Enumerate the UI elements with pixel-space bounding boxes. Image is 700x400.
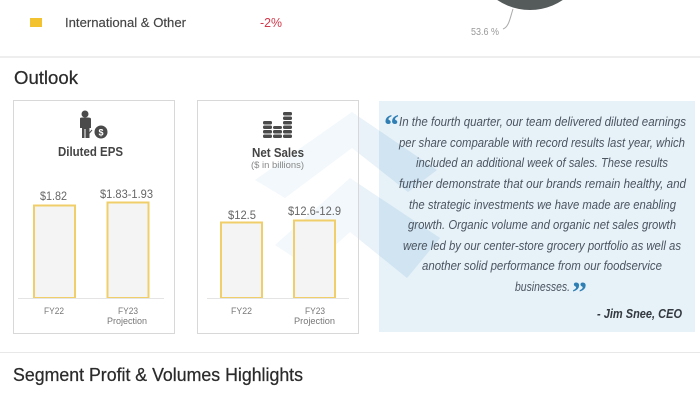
bar chart: Net Sales: FY22: [231, 306, 252, 316]
bar chart: Diluted EPS: $1.83-1.93: [100, 187, 153, 201]
bar chart: Net Sales: $12.5: [228, 208, 256, 222]
attribution: - Jim Snee, CEO: [597, 306, 682, 321]
panel: Diluted EPS: [14, 100, 174, 334]
icon: person with dollar coin: [80, 110, 108, 138]
bar chart: Diluted EPS: Projection: [107, 316, 147, 326]
bar chart: Net Sales: $12.6-12.9: [288, 204, 341, 218]
pie chart fragment with label: 53.6 %: [471, 27, 499, 38]
bar chart: Net Sales: Projection: [294, 316, 335, 326]
bar chart: Net Sales: [207, 204, 349, 326]
legend row: International & Other: International & Other: [65, 15, 187, 30]
quote text: [398, 114, 687, 294]
heading: Outlook: Outlook: [14, 68, 79, 88]
closing quote mark: ”: [572, 276, 587, 309]
icon: coin stacks: [263, 112, 292, 138]
quote text: businesses.: [515, 279, 570, 294]
bar chart: Diluted EPS: FY22: [44, 306, 64, 316]
legend row: International & Other: [30, 15, 282, 30]
bar chart: Net Sales: FY23: [305, 306, 325, 316]
subheading: units: ($ in billions): [251, 160, 304, 171]
bar chart: Diluted EPS: $1.82: [40, 189, 67, 203]
heading: Diluted EPS: Diluted EPS: [58, 144, 123, 159]
heading: Net Sales: Net Sales: [252, 145, 304, 160]
quote text: another solid performance from our foodservice: [422, 258, 662, 273]
bar chart: Diluted EPS: [18, 187, 164, 326]
pie chart fragment with label: [471, 0, 589, 38]
panel: quote: [379, 101, 695, 332]
bar chart: Diluted EPS: FY23: [118, 306, 138, 316]
icon: person with dollar coin: $: [98, 128, 104, 138]
heading: Segment Profit & Volumes Highlights: Segment Profit & Volumes Highlights: [13, 365, 303, 385]
legend row: International & Other: -2%: [260, 15, 282, 30]
panel: Net Sales: [198, 100, 358, 334]
opening quote mark: “: [384, 109, 399, 142]
